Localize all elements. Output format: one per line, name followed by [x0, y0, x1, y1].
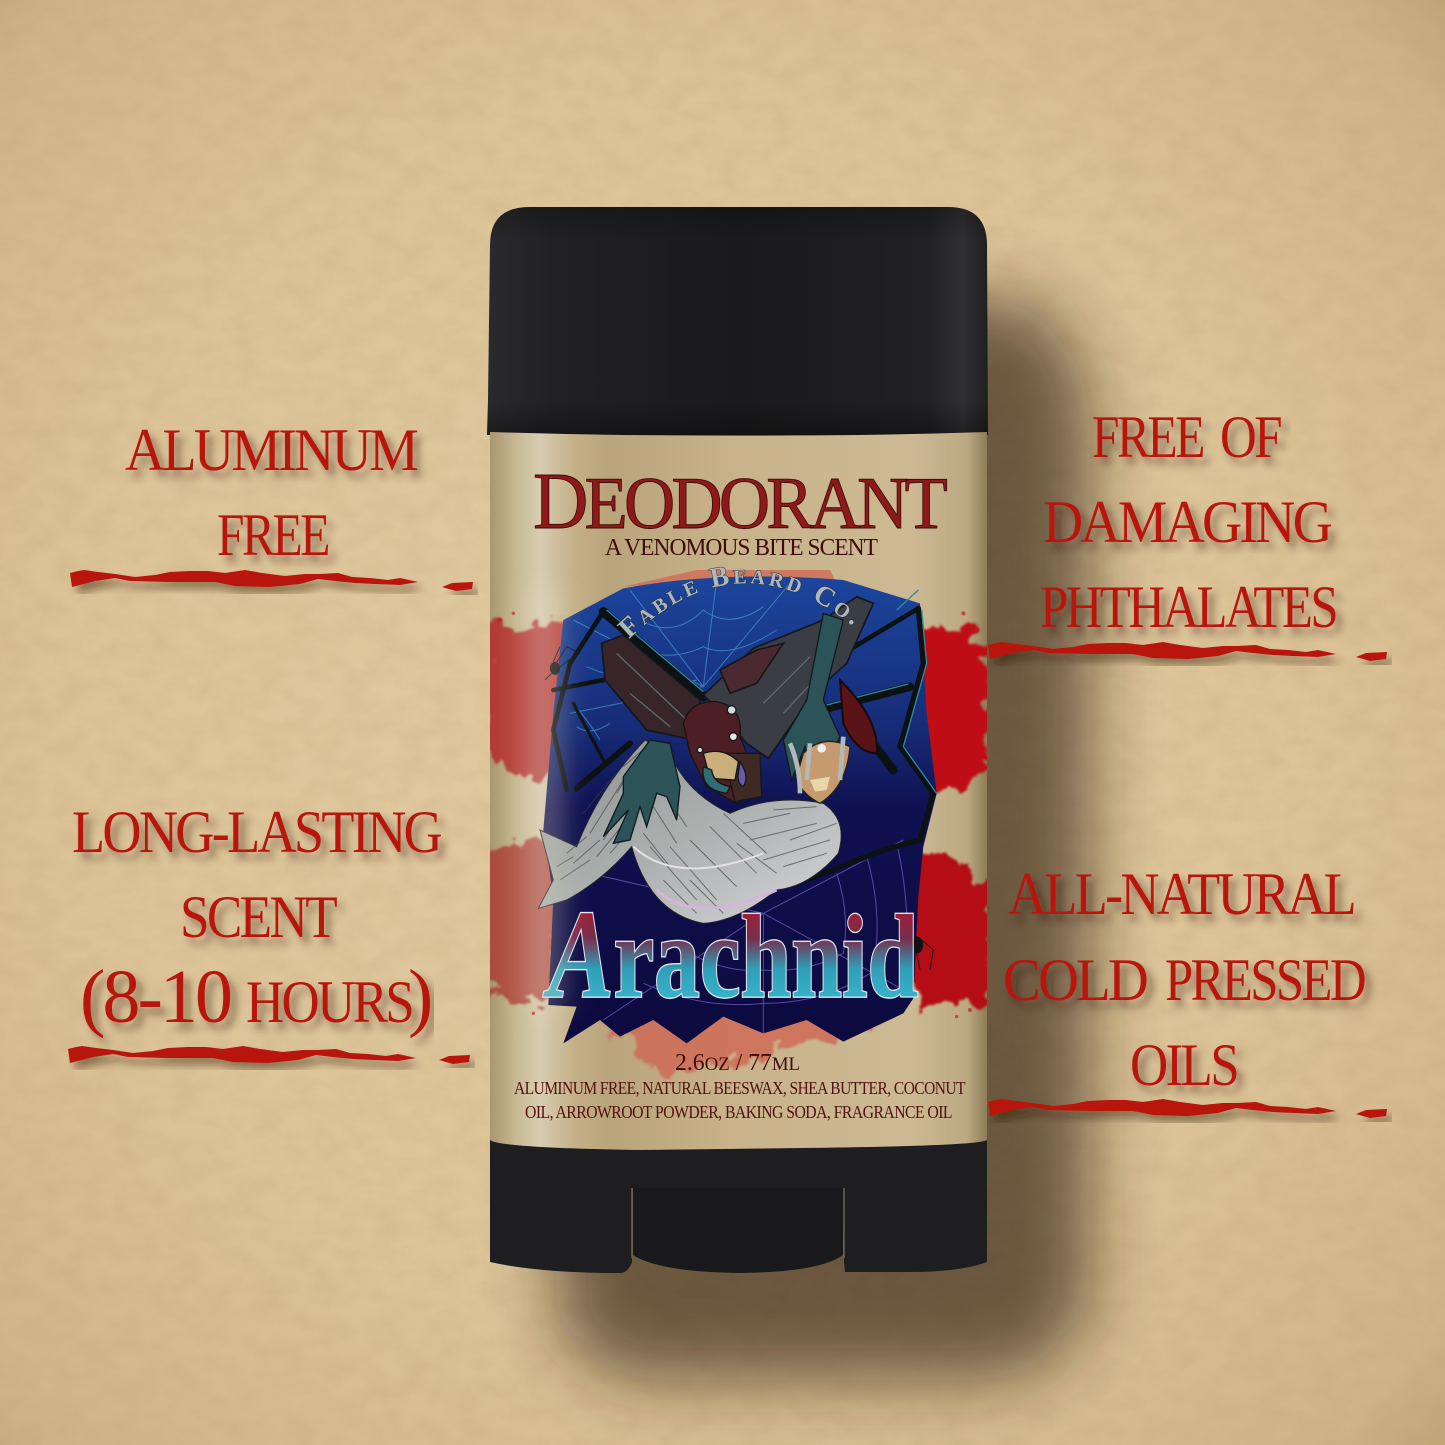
product name: Arachnid: Arachnid: [543, 885, 918, 1025]
product: deodorant stick: [487, 207, 988, 1273]
callout: free of damaging phthalates: DAMAGING: [1043, 489, 1332, 555]
callout: long-lasting scent: SCENT: [180, 884, 337, 950]
callout: long-lasting scent: (8-10: [80, 955, 231, 1039]
callout: all-natural cold pressed oils: ALL-NATURAL: [1008, 861, 1354, 927]
label highlight sheen: [515, 590, 575, 1010]
callout: free of damaging phthalates: PHTHALATES: [1040, 574, 1336, 640]
callout: long-lasting scent: HOURS: [246, 969, 412, 1035]
spider head and fangs: [683, 702, 763, 803]
callout: all-natural cold pressed oils: COLD: [1003, 947, 1147, 1013]
callout: aluminum free: [70, 417, 473, 591]
small spiders: [545, 647, 933, 970]
callout: aluminum free: FREE: [217, 502, 328, 568]
callout: long-lasting scent: ): [408, 955, 430, 1039]
ingredients text: ALUMINUM FREE, NATURAL BEESWAX, SHEA BUTTER, COCONUT: [514, 1078, 966, 1098]
web strands: [570, 580, 790, 740]
red ink clouds: [483, 570, 990, 1070]
label artwork: spider illustration: [490, 566, 987, 1080]
callout: free of damaging phthalates: FREE: [1092, 404, 1203, 470]
bottle drop shadow: [555, 300, 1090, 1380]
wrapped victim cocoon: [538, 740, 841, 923]
spider back legs: [553, 608, 933, 880]
victim face: [790, 737, 850, 803]
ingredients text: OIL, ARROWROOT POWDER, BAKING SODA, FRAGRANCE OIL: [525, 1102, 952, 1122]
paper label: [490, 432, 987, 1150]
callout: all-natural cold pressed oils: PRESSED: [1165, 947, 1365, 1013]
spider foreleg and abdomen: [602, 597, 873, 758]
label subheading: A VENOMOUS BITE SCENT: [605, 535, 878, 561]
spider brand arc text: Fable Beard Co.: [616, 566, 854, 640]
web shield backdrop: [543, 576, 937, 1043]
spider red sac: [840, 680, 877, 753]
callout: free of damaging phthalates: [988, 404, 1387, 661]
callout: long-lasting scent: [68, 799, 470, 1064]
label heading: DEODORANT: [533, 458, 947, 546]
callout: long-lasting scent: LONG-LASTING: [72, 799, 442, 865]
callout: all-natural cold pressed oils: OILS: [1130, 1032, 1237, 1098]
callout: free of damaging phthalates: OF: [1220, 404, 1281, 470]
claw hands: [603, 613, 843, 843]
size text: 2.6OZ / 77ML: [675, 1050, 800, 1076]
callout: all-natural cold pressed oils: [988, 861, 1387, 1118]
bottle base with twist feet: [490, 1140, 987, 1273]
callout: aluminum free: ALUMINUM: [125, 417, 418, 483]
ingredients text: [514, 1078, 966, 1122]
bottle cap: [487, 207, 988, 435]
